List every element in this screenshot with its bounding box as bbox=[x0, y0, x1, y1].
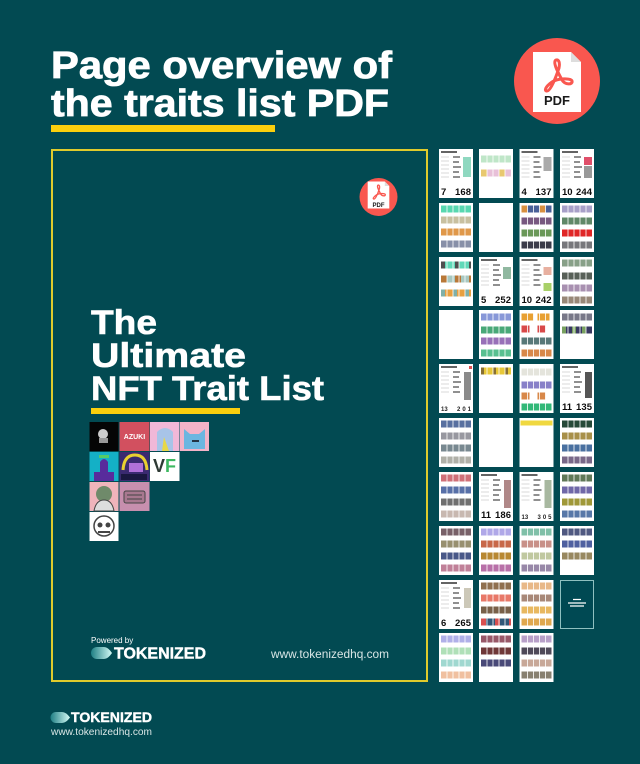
page 8 bbox=[560, 203, 594, 252]
title: Page overview of bbox=[51, 45, 392, 87]
cover heading bbox=[91, 304, 324, 408]
page 14 bbox=[479, 310, 513, 359]
page 25 bbox=[439, 472, 473, 521]
logo: azuki: AZUKI bbox=[124, 434, 145, 441]
page 1 bbox=[439, 149, 473, 198]
page 4: 10 bbox=[562, 187, 573, 198]
page 33 bbox=[439, 580, 473, 629]
page 35 bbox=[520, 580, 554, 629]
page 1: 168 bbox=[455, 187, 471, 198]
page 33: 265 bbox=[455, 618, 472, 629]
page 13 bbox=[439, 310, 473, 359]
page 29 bbox=[439, 526, 473, 575]
title: the traits list PDF bbox=[51, 83, 389, 125]
page 15 bbox=[520, 310, 554, 359]
icon: large PDF badge: PDF bbox=[544, 93, 570, 108]
page 4 bbox=[560, 149, 594, 198]
page 9 bbox=[439, 257, 473, 306]
page 5 bbox=[439, 203, 473, 252]
logo: pastel character bbox=[150, 422, 180, 451]
powered by logo bbox=[91, 636, 206, 662]
page 2 bbox=[479, 149, 513, 198]
logo: blue creature bbox=[180, 422, 209, 451]
page 38 bbox=[479, 633, 513, 682]
page 3: 137 bbox=[536, 187, 552, 198]
title bbox=[51, 45, 392, 125]
page 26 bbox=[479, 472, 513, 521]
cover heading: NFT Trait List bbox=[91, 370, 324, 408]
page thumbnails grid bbox=[439, 149, 594, 682]
page 36: dark closing page bbox=[560, 580, 594, 628]
page 10: 5 bbox=[481, 295, 487, 306]
page 23 bbox=[520, 418, 554, 467]
page 16 bbox=[560, 310, 594, 359]
page 31 bbox=[520, 526, 554, 575]
page 20 bbox=[560, 364, 594, 413]
page 17 bbox=[439, 364, 473, 413]
page 18 bbox=[479, 364, 513, 413]
logo: pink punk bbox=[90, 482, 118, 511]
title underline bbox=[51, 125, 275, 132]
page 10: 252 bbox=[495, 295, 511, 306]
powered by logo: Powered by bbox=[91, 636, 133, 645]
page 7 bbox=[520, 203, 554, 252]
logo: ape club bbox=[90, 422, 118, 451]
page 28 bbox=[560, 472, 594, 521]
page 19 bbox=[520, 364, 554, 413]
page 12 bbox=[560, 257, 594, 306]
logo: mauve device bbox=[120, 482, 150, 511]
page 26: 11 bbox=[481, 510, 492, 521]
logo: VF: VF bbox=[153, 456, 176, 476]
page 30 bbox=[479, 526, 513, 575]
page 4: 244 bbox=[576, 187, 593, 198]
page 20: 11 bbox=[562, 402, 573, 413]
page 17: 201 bbox=[457, 407, 472, 413]
logo: gorilla bbox=[120, 452, 150, 481]
page 34 bbox=[479, 580, 513, 629]
page 3: 4 bbox=[522, 187, 528, 198]
page 10 bbox=[479, 257, 513, 306]
page 27: 305 bbox=[538, 515, 552, 521]
page 20: 135 bbox=[576, 402, 593, 413]
page 21 bbox=[439, 418, 473, 467]
page 33: 6 bbox=[441, 618, 446, 629]
cover heading: Ultimate bbox=[91, 337, 246, 375]
logo: purple figure bbox=[90, 452, 118, 481]
page 32 bbox=[560, 526, 594, 575]
page 3 bbox=[520, 149, 554, 198]
page 37 bbox=[439, 633, 473, 682]
page 27 bbox=[520, 472, 554, 521]
icon: small PDF badge: PDF bbox=[372, 203, 385, 209]
panel: PDF cover page bbox=[52, 150, 427, 681]
page 27: 13 bbox=[522, 515, 529, 521]
powered by logo: TOKENIZED bbox=[114, 646, 206, 662]
logo: astronaut bbox=[90, 512, 118, 541]
page 24 bbox=[560, 418, 594, 467]
page 11: 242 bbox=[536, 295, 552, 306]
page 26: 186 bbox=[495, 510, 511, 521]
page 11 bbox=[520, 257, 554, 306]
page 17: 13 bbox=[441, 407, 448, 413]
footer website: www.tokenizedhq.com bbox=[50, 727, 152, 738]
page 1: 7 bbox=[441, 187, 446, 198]
page 22 bbox=[479, 418, 513, 467]
icon: small PDF badge bbox=[360, 178, 398, 216]
page 39 bbox=[520, 633, 554, 682]
cover website: www.tokenizedhq.com bbox=[270, 649, 389, 661]
icon: large PDF badge bbox=[514, 38, 600, 124]
cover heading: The bbox=[91, 304, 157, 342]
page 11: 10 bbox=[522, 295, 532, 306]
cover heading underline bbox=[91, 408, 240, 414]
footer logo: TOKENIZED bbox=[71, 710, 152, 725]
page 6 bbox=[479, 203, 513, 252]
NFT collection logos bbox=[90, 422, 209, 541]
